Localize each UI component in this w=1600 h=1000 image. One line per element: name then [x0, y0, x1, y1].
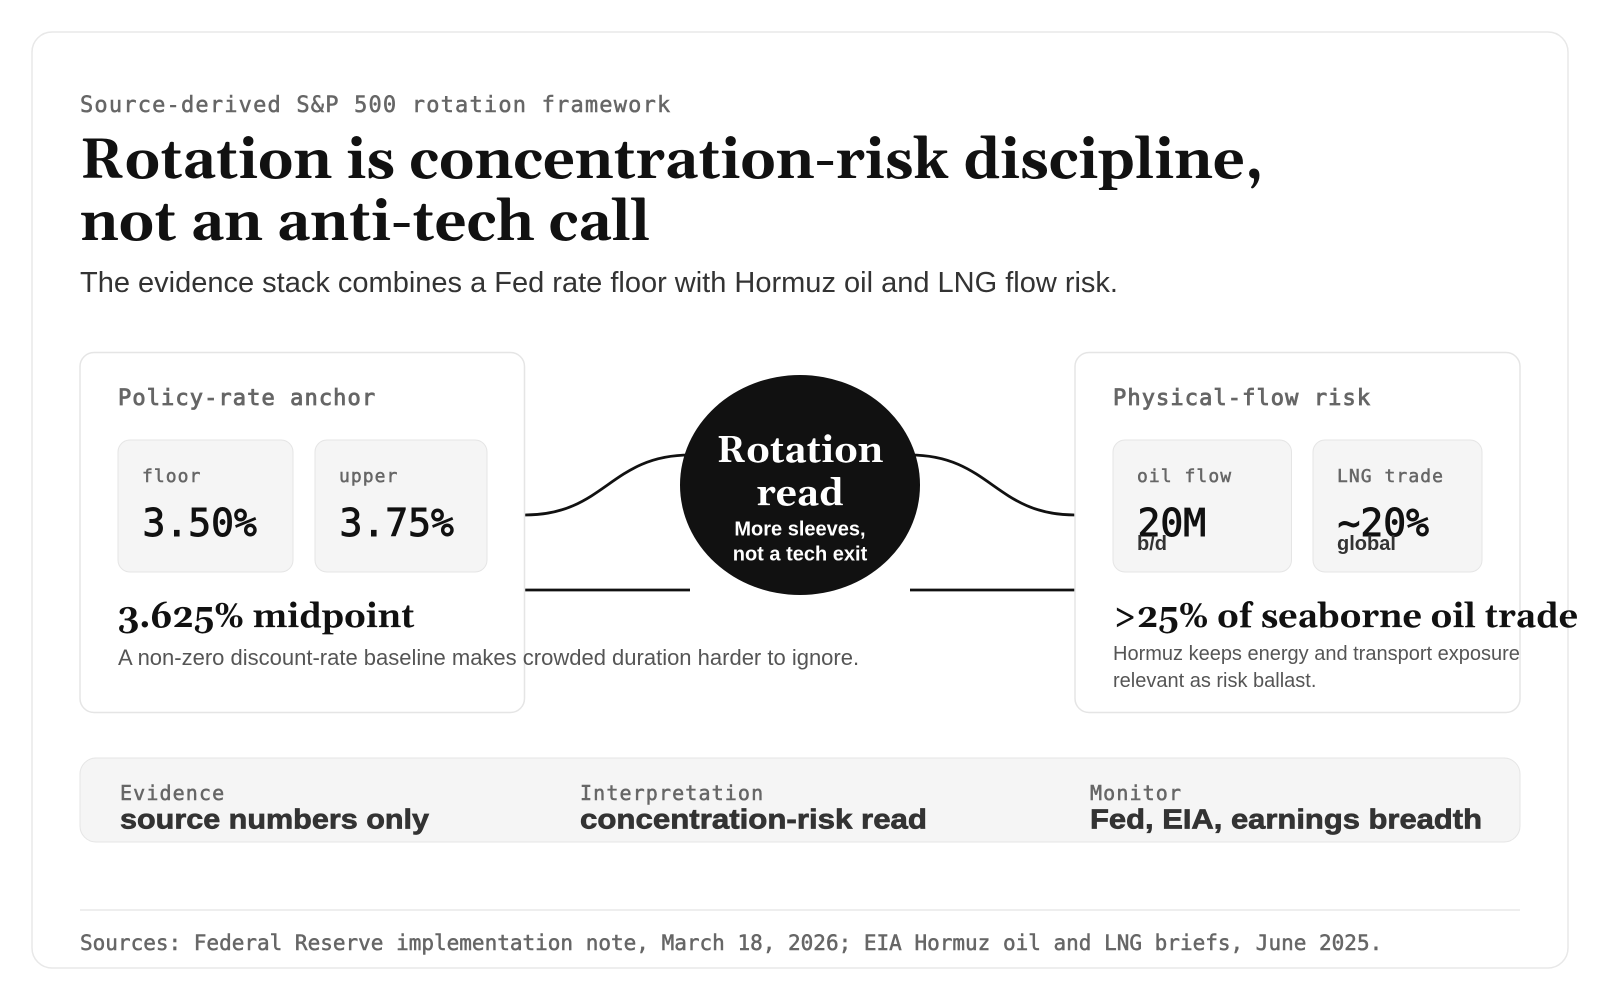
center node: rotation read: not a tech exit — [733, 544, 868, 566]
panel: physical-flow risk — [1075, 352, 1578, 712]
center node: rotation read: More sleeves, — [734, 518, 866, 540]
eyebrow: Source-derived S&P 500 rotation framework — [80, 93, 671, 118]
center node: rotation read: Rotation — [717, 428, 884, 475]
connector lines — [525, 455, 1075, 590]
stat: LNG trade: ~20% — [1338, 501, 1429, 545]
interpretation item: concentration-risk read — [580, 804, 927, 834]
subtitle: The evidence stack combines a Fed rate floor with Hormuz oil and LNG flow risk. — [80, 267, 1118, 299]
midpoint headline: 3.625% midpoint — [118, 595, 415, 639]
title: Rotation is concentration-risk discipline, — [80, 127, 1263, 198]
center node: rotation read: read — [757, 471, 843, 518]
panel: policy-rate anchor — [80, 352, 859, 712]
stat: oil flow: oil flow — [1137, 466, 1232, 487]
center node: rotation read — [680, 375, 920, 595]
seaborne note: Hormuz keeps energy and transport exposure — [1113, 643, 1520, 665]
seaborne note: relevant as risk ballast. — [1113, 670, 1316, 692]
midpoint note: A non-zero discount-rate baseline makes crowded duration harder to ignore. — [118, 645, 859, 670]
evidence item: Evidence — [120, 781, 225, 805]
stat: oil flow — [1113, 440, 1292, 572]
title — [80, 127, 1263, 260]
panel heading: Policy-rate anchor — [118, 386, 376, 411]
stat: oil flow: b/d — [1137, 533, 1167, 555]
stat: upper: upper — [339, 466, 398, 487]
stat: floor: 3.50% — [142, 501, 257, 545]
stat: upper: 3.75% — [340, 501, 454, 545]
seaborne note — [1113, 643, 1520, 692]
monitor item: Fed, EIA, earnings breadth — [1090, 804, 1482, 834]
stat: floor: floor — [142, 466, 201, 487]
panel heading: Physical-flow risk — [1113, 386, 1371, 411]
stat: upper — [315, 440, 487, 572]
evidence item: source numbers only — [120, 804, 429, 834]
sources: Sources: Federal Reserve implementation note, March 18, 2026; EIA Hormuz oil and LNG briefs, June 2025. — [80, 931, 1382, 955]
evidence item — [120, 781, 429, 834]
monitor item: Monitor — [1090, 781, 1182, 805]
interpretation item: Interpretation — [580, 781, 764, 805]
stat: oil flow: 20M — [1138, 501, 1206, 545]
stat: LNG trade — [1313, 440, 1482, 572]
summary strip — [80, 758, 1520, 842]
stat: LNG trade: global — [1337, 533, 1396, 555]
title: not an anti-tech call — [80, 189, 650, 260]
seaborne headline: >25% of seaborne oil trade — [1113, 595, 1578, 639]
stat: LNG trade: LNG trade — [1337, 466, 1444, 487]
stat: floor — [118, 440, 293, 572]
monitor item — [1090, 781, 1482, 834]
interpretation item — [580, 781, 927, 834]
